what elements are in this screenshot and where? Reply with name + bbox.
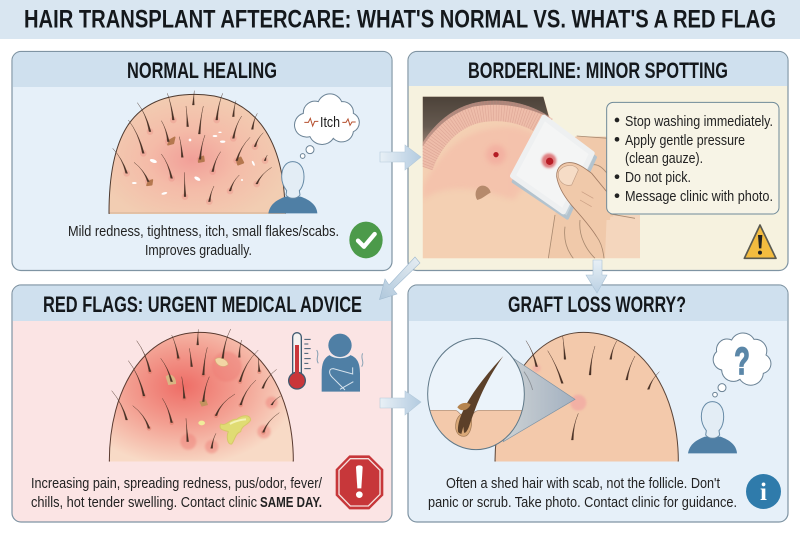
text: graft loss description: panic or scrub. Take photo. Contact clinic for guidance. <box>428 494 737 511</box>
text: red flags description: chills, hot tender swelling. Contact clinic <box>31 494 257 511</box>
icon: info circle: i <box>760 479 767 506</box>
text: instruction list <box>625 113 773 205</box>
light area beneath hand <box>605 215 640 258</box>
illustration: gauze on scalp <box>423 97 779 258</box>
text: red flags description: Increasing pain, spreading redness, pus/odor, fever/ <box>31 475 323 492</box>
panel: red flags <box>12 285 392 522</box>
arrow: borderline to red flags <box>380 257 420 300</box>
text: graft loss description <box>428 475 737 511</box>
thought bubble: question: ? <box>734 340 750 383</box>
text: instruction list: (clean gauze). <box>625 150 703 167</box>
hand palm <box>548 137 613 258</box>
text: graft loss description: Often a shed hair with scab, not the follicle. Don't <box>446 475 721 492</box>
text: normal healing description: Mild redness, tightness, itch, small flakes/scabs. <box>68 223 339 240</box>
text: red flags description: SAME DAY. <box>260 494 322 511</box>
panel: borderline minor spotting <box>408 52 788 270</box>
text: instruction list: Apply gentle pressure <box>625 132 745 149</box>
title banner <box>0 0 800 39</box>
arrow: normal to borderline <box>380 145 421 170</box>
icon: stop sign <box>336 455 383 509</box>
thought bubble: question <box>713 333 771 397</box>
heading: red flags: RED FLAGS: URGENT MEDICAL ADVICE <box>43 292 362 317</box>
icon: info circle <box>746 474 781 509</box>
panel: normal healing <box>12 52 392 270</box>
stubble hairline <box>423 111 547 167</box>
text: normal healing description: Improves gradually. <box>145 242 252 259</box>
magnifier cone <box>503 355 575 442</box>
magnifier circle <box>427 338 525 450</box>
icon: thermometer <box>289 333 311 389</box>
callout: instructions <box>607 102 779 214</box>
arrow: red flags to graft loss <box>380 391 421 415</box>
text: instruction list: Stop washing immediately. <box>625 113 773 130</box>
icon: person thinking <box>268 162 317 213</box>
illustration: scalp and magnified follicle <box>420 332 771 461</box>
head skin <box>423 97 557 258</box>
panel: graft loss worry <box>408 285 788 522</box>
text: red flags description <box>31 475 323 511</box>
icon: warning triangle <box>744 225 776 258</box>
heading: normal healing: NORMAL HEALING <box>127 58 277 83</box>
arrow: borderline to graft loss <box>586 260 607 293</box>
dark hair <box>423 97 549 147</box>
thought bubble: itch <box>295 94 359 158</box>
illustration: infected scalp <box>109 329 363 461</box>
itch label: Itch <box>320 114 340 131</box>
thumb <box>557 163 613 220</box>
text: instruction list: Message clinic with photo. <box>625 188 773 205</box>
icon: person with chills <box>317 334 363 392</box>
illustration: healing scalp <box>109 91 359 213</box>
gauze pad <box>512 154 597 220</box>
heading: graft loss: GRAFT LOSS WORRY? <box>508 292 686 317</box>
text: normal healing description <box>68 223 339 259</box>
icon: green check <box>349 222 383 258</box>
text: instruction list: Do not pick. <box>625 169 691 186</box>
icon: worried person <box>688 402 737 453</box>
